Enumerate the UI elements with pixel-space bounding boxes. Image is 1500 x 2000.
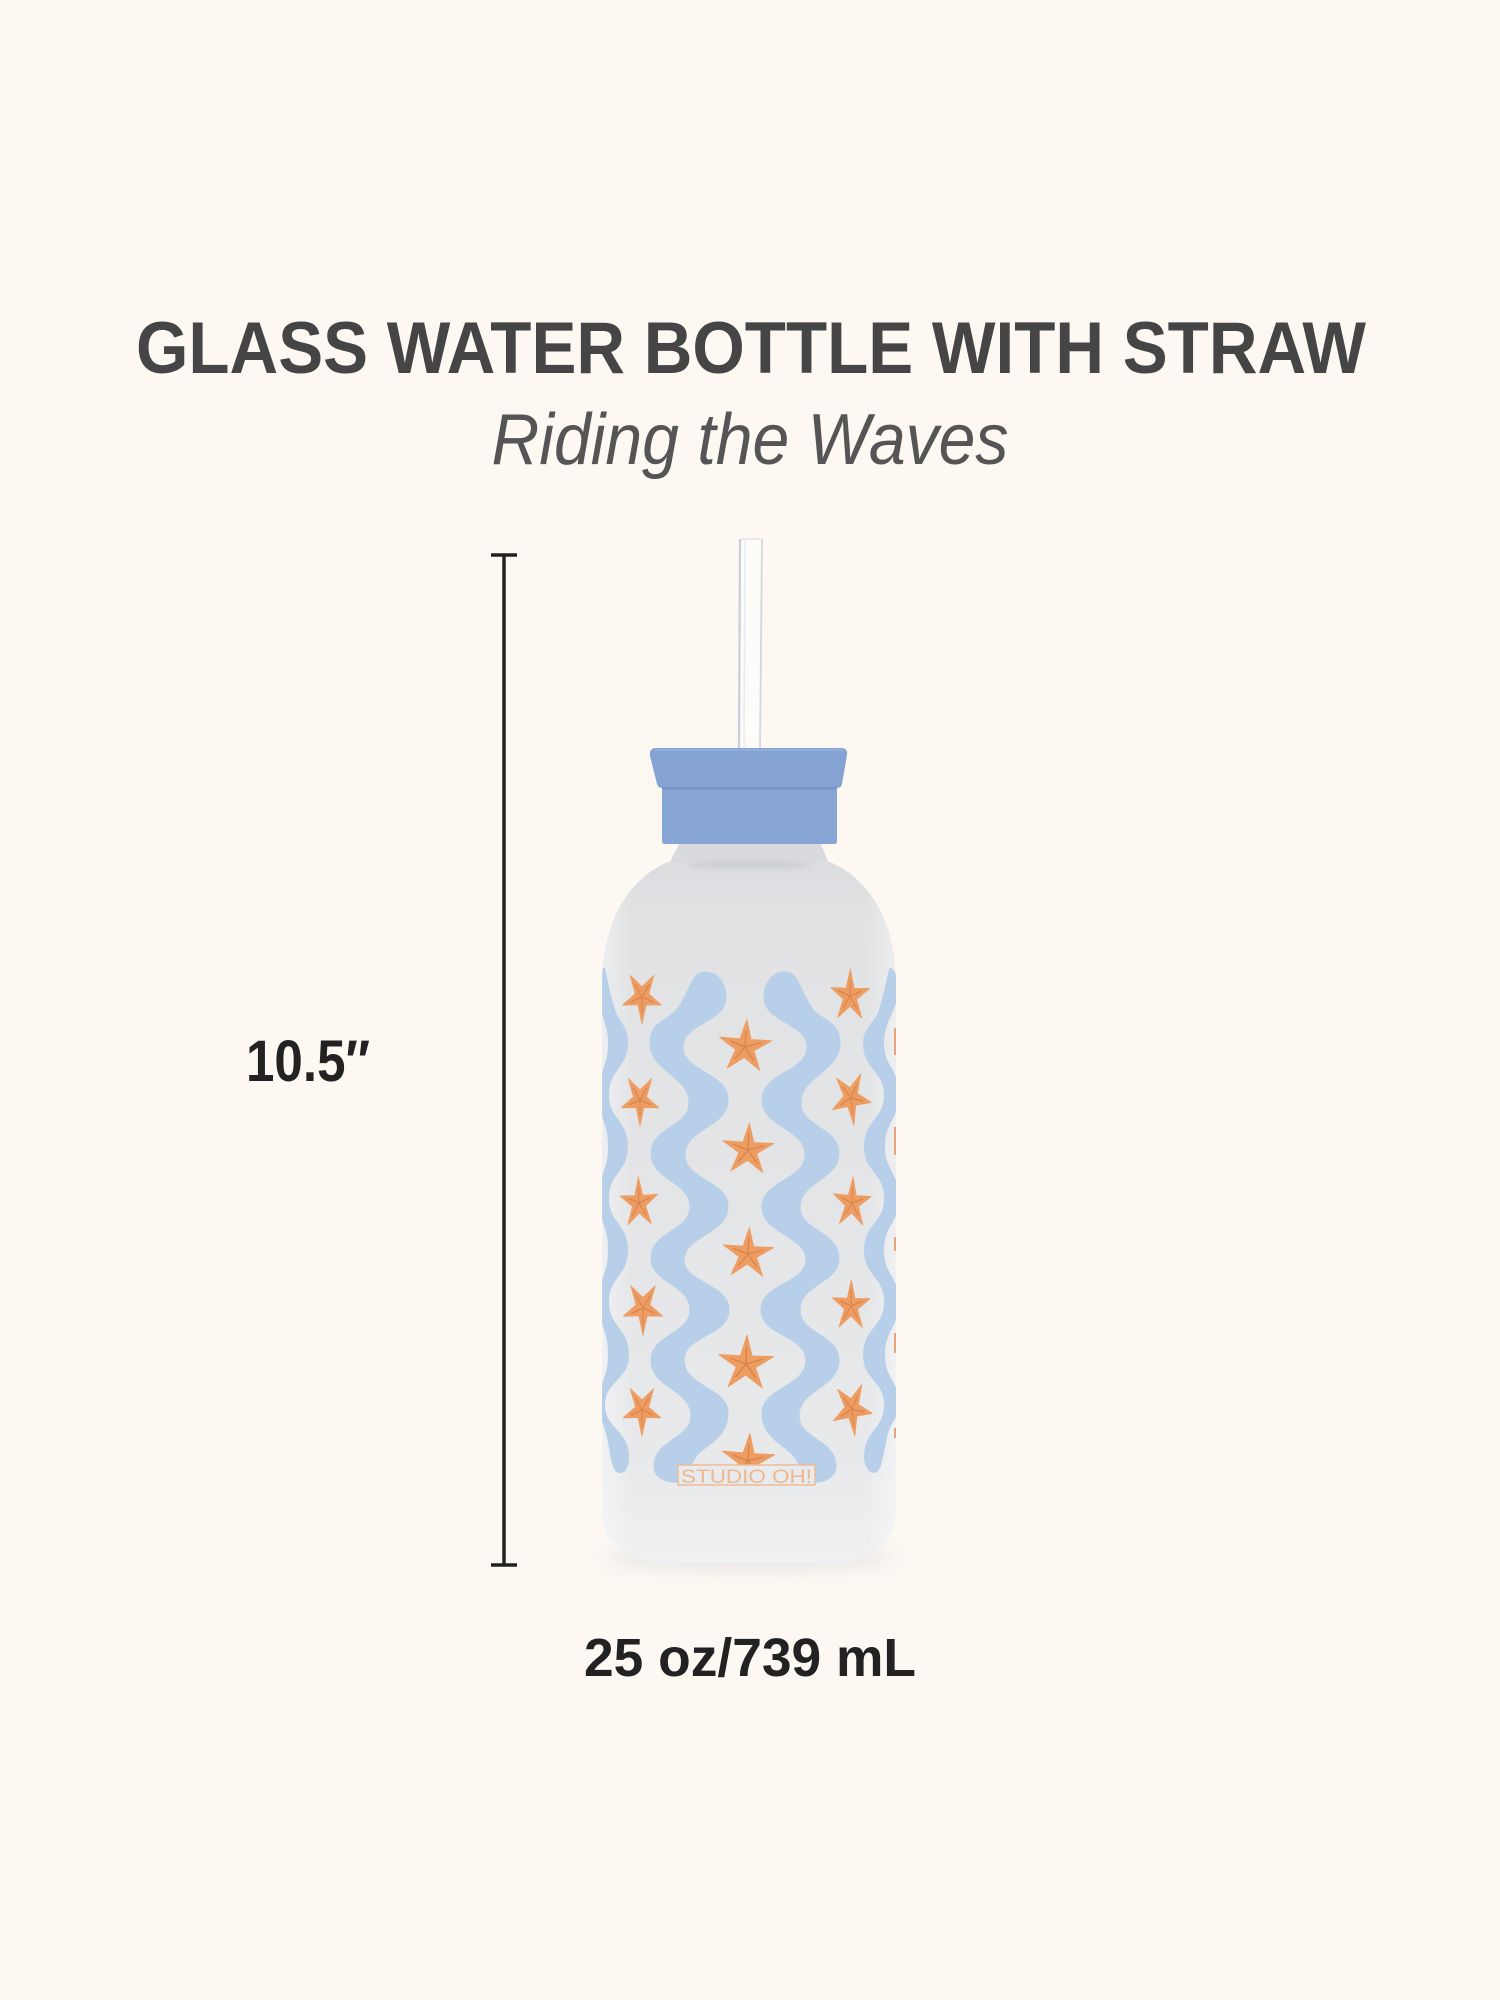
height dimension line [491, 555, 517, 1565]
straw [739, 539, 762, 750]
bottle illustration [599, 539, 898, 1570]
starfish slivers at right edge [894, 1028, 896, 1438]
bottle shadow [604, 1546, 894, 1570]
shoulder shadow [687, 862, 811, 868]
starfish [620, 969, 874, 1485]
lid [650, 748, 847, 844]
capacity label: 25 oz/739 mL [584, 1628, 916, 1688]
bottle neck [668, 842, 830, 866]
wave pattern [599, 969, 898, 1481]
height label: 10.5″ [246, 1029, 370, 1094]
infographic canvas [138, 322, 1366, 1678]
brand label: STUDIO OH! [681, 1467, 812, 1488]
subtitle: Riding the Waves [492, 400, 1008, 480]
body edge highlight [602, 862, 896, 1563]
frosted glass body [602, 862, 896, 1563]
title: GLASS WATER BOTTLE WITH STRAW [136, 308, 1366, 389]
wave pattern and starfish [599, 969, 898, 1485]
